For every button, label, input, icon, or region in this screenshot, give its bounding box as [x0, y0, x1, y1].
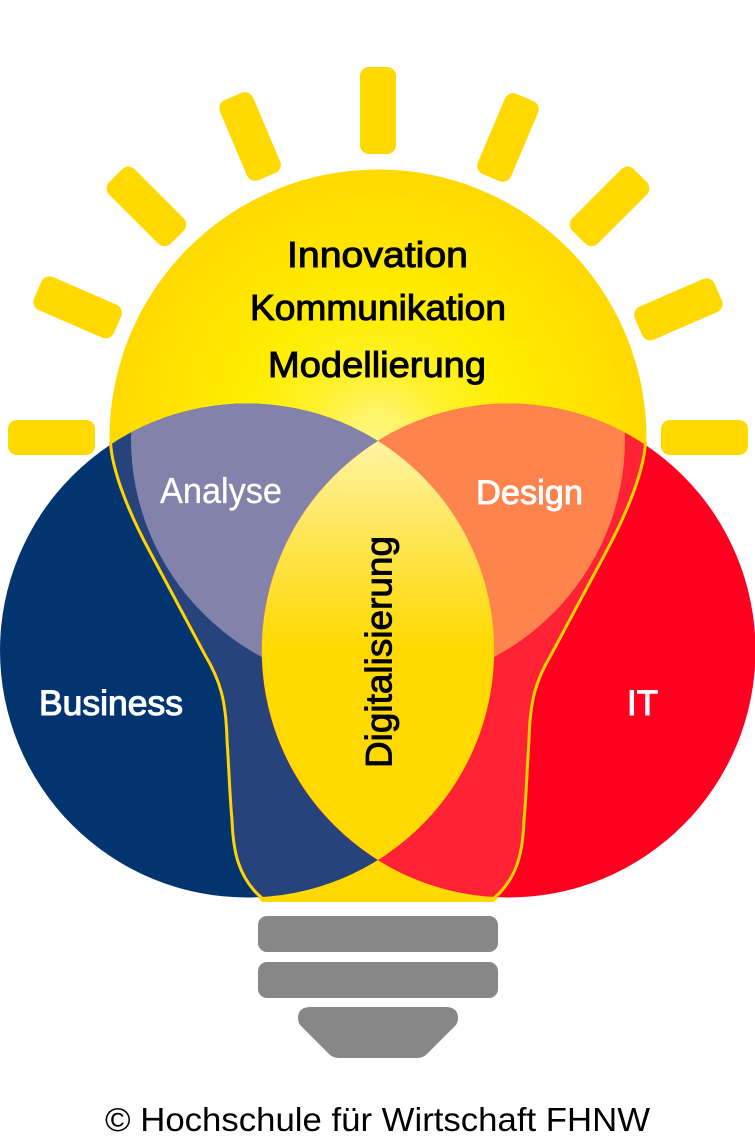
segment: Analyse: [131, 404, 378, 657]
label: Analyse: Analyse: [160, 470, 282, 511]
segment: Design: [262, 404, 625, 657]
label: IT: IT: [627, 684, 658, 723]
IT overlap inside bulb: [262, 404, 644, 898]
sun rays: [8, 67, 748, 455]
circle: IT: [262, 404, 755, 898]
heading: Kommunikation: Kommunikation: [250, 287, 506, 328]
label: Digitalisierung: Digitalisierung: [358, 536, 400, 768]
heading: Modellierung: Modellierung: [268, 344, 486, 385]
label: Business: Business: [39, 684, 183, 723]
Business overlap inside bulb: [112, 404, 378, 898]
lamp base: [258, 916, 498, 1058]
circle: Business: [0, 404, 494, 898]
light bulb body: [110, 170, 646, 902]
label: Design: Design: [476, 474, 583, 512]
bulb outline: [110, 442, 646, 898]
copyright footer: © Hochschule für Wirtschaft FHNW: [105, 1102, 650, 1139]
segment: Digitalisierung: [262, 441, 494, 860]
heading: Innovation: Innovation: [287, 234, 468, 275]
